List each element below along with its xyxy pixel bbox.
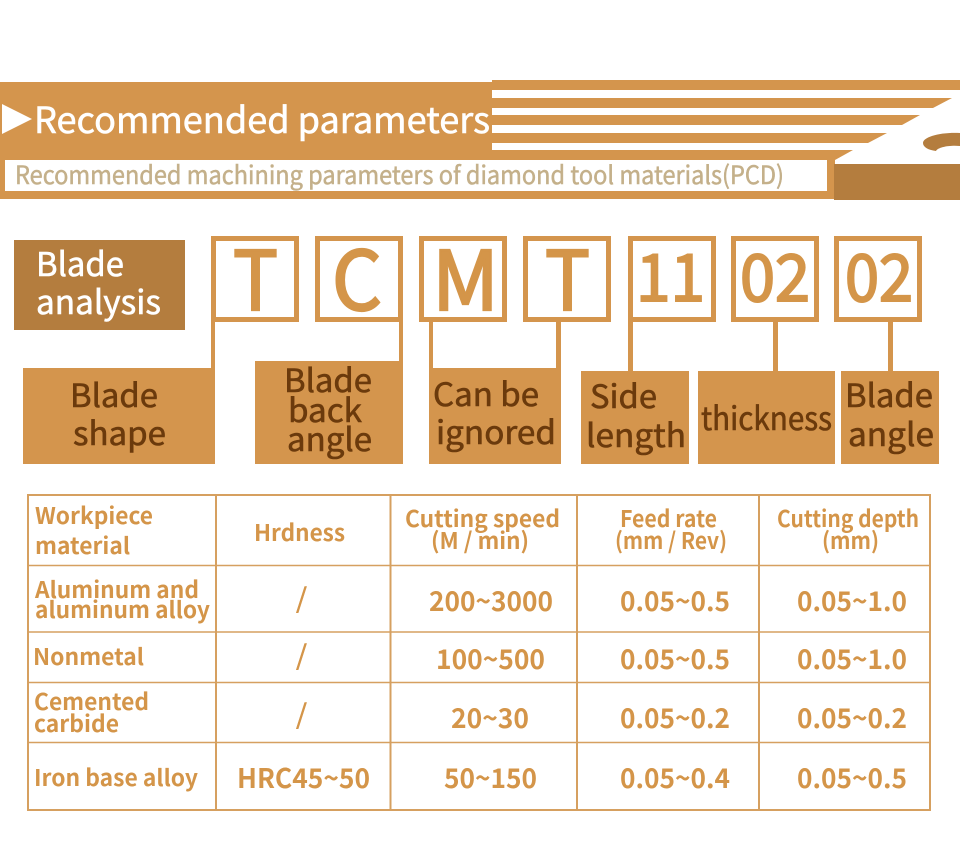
insert hole crescent xyxy=(923,133,960,151)
label: side length: Side xyxy=(590,372,657,418)
code box: 02: 02 xyxy=(740,226,810,320)
table header row: (mm) xyxy=(822,522,879,556)
label: thickness: thickness xyxy=(701,394,832,440)
row: nonmetal: Nonmetal xyxy=(33,638,144,672)
row: aluminum: aluminum alloy xyxy=(35,591,210,625)
label: thickness xyxy=(698,371,835,464)
table header row: Hrdness xyxy=(254,514,345,548)
row: aluminum: 200~3000 xyxy=(429,580,553,619)
label: can be ignored xyxy=(429,368,561,464)
title: Recommended parameters xyxy=(34,92,490,144)
blade analysis heading: Blade xyxy=(36,238,124,286)
label: side length xyxy=(581,371,689,464)
subtitle bar xyxy=(5,160,827,191)
row: aluminum: Aluminum and xyxy=(34,571,199,605)
table header row: (mm / Rev) xyxy=(615,522,727,556)
blade analysis heading: analysis xyxy=(36,276,161,324)
insert side block xyxy=(834,164,960,200)
row: nonmetal: 0.05~1.0 xyxy=(797,638,907,677)
code box: T xyxy=(526,215,608,334)
row: cemented carbide: carbide xyxy=(34,705,119,739)
connector lines xyxy=(211,320,893,373)
banner stripes xyxy=(0,80,960,199)
parameter table xyxy=(28,495,930,810)
table header row: Cutting depth xyxy=(777,500,919,534)
code box: T: T xyxy=(545,215,590,334)
row: cemented carbide: 0.05~0.2 xyxy=(797,697,907,736)
table header row xyxy=(35,497,919,561)
code box: 11: 11 xyxy=(636,226,705,320)
label: blade back angle: angle xyxy=(287,415,372,461)
subtitle: Recommended machining parameters of diamond tool materials(PCD) xyxy=(15,156,784,192)
code box: T xyxy=(214,215,296,334)
row: nonmetal: 0.05~0.5 xyxy=(620,638,730,677)
row: cemented carbide: 0.05~0.2 xyxy=(620,697,730,736)
code letter boxes xyxy=(214,215,920,334)
row: iron base alloy: 0.05~0.4 xyxy=(620,757,730,796)
label: can be ignored: ignored xyxy=(436,408,556,454)
row: nonmetal: 100~500 xyxy=(436,638,545,677)
row: iron base alloy: HRC45~50 xyxy=(237,757,370,796)
row: nonmetal: / xyxy=(296,634,307,673)
code box: C: C xyxy=(332,215,382,334)
code box: 02: 02 xyxy=(845,226,913,320)
row: aluminum: 0.05~0.5 xyxy=(620,580,730,619)
label: blade back angle: back xyxy=(288,386,362,432)
row: cemented carbide: 20~30 xyxy=(451,697,529,736)
label: blade angle xyxy=(841,371,939,464)
label: blade angle: Blade xyxy=(845,371,933,417)
table header row: material xyxy=(35,527,130,561)
table header row: (M / min) xyxy=(431,522,529,556)
blade analysis heading xyxy=(14,238,185,330)
label: blade back angle: Blade xyxy=(284,356,372,402)
row: cemented carbide xyxy=(34,683,907,739)
code box: C xyxy=(318,215,400,334)
table header row: Feed rate xyxy=(620,500,717,534)
row: cemented carbide: Cemented xyxy=(34,683,149,717)
label: blade angle: angle xyxy=(848,410,934,456)
row: aluminum xyxy=(34,571,907,625)
row: nonmetal xyxy=(33,634,907,677)
code box: M: M xyxy=(432,215,499,334)
row: iron base alloy: Iron base alloy xyxy=(34,759,198,793)
row: iron base alloy: 50~150 xyxy=(444,757,537,796)
table header row: Workpiece xyxy=(35,497,153,531)
row: aluminum: 0.05~1.0 xyxy=(797,580,907,619)
header banner xyxy=(0,80,960,200)
label: blade back angle xyxy=(255,356,403,464)
table header row: Cutting speed xyxy=(405,500,560,534)
label: blade shape xyxy=(23,368,215,464)
row: iron base alloy xyxy=(34,757,907,796)
label: side length: length xyxy=(586,411,686,457)
label: blade shape: Blade xyxy=(70,371,158,417)
row: cemented carbide: / xyxy=(296,693,307,732)
row: aluminum: / xyxy=(296,577,307,616)
arrow icon xyxy=(2,104,32,134)
banner background xyxy=(0,82,492,160)
row: iron base alloy: 0.05~0.5 xyxy=(797,757,907,796)
label: can be ignored: Can be xyxy=(433,370,539,416)
table grid xyxy=(28,495,930,810)
code box: T: T xyxy=(233,215,278,334)
label: blade shape: shape xyxy=(73,409,166,455)
